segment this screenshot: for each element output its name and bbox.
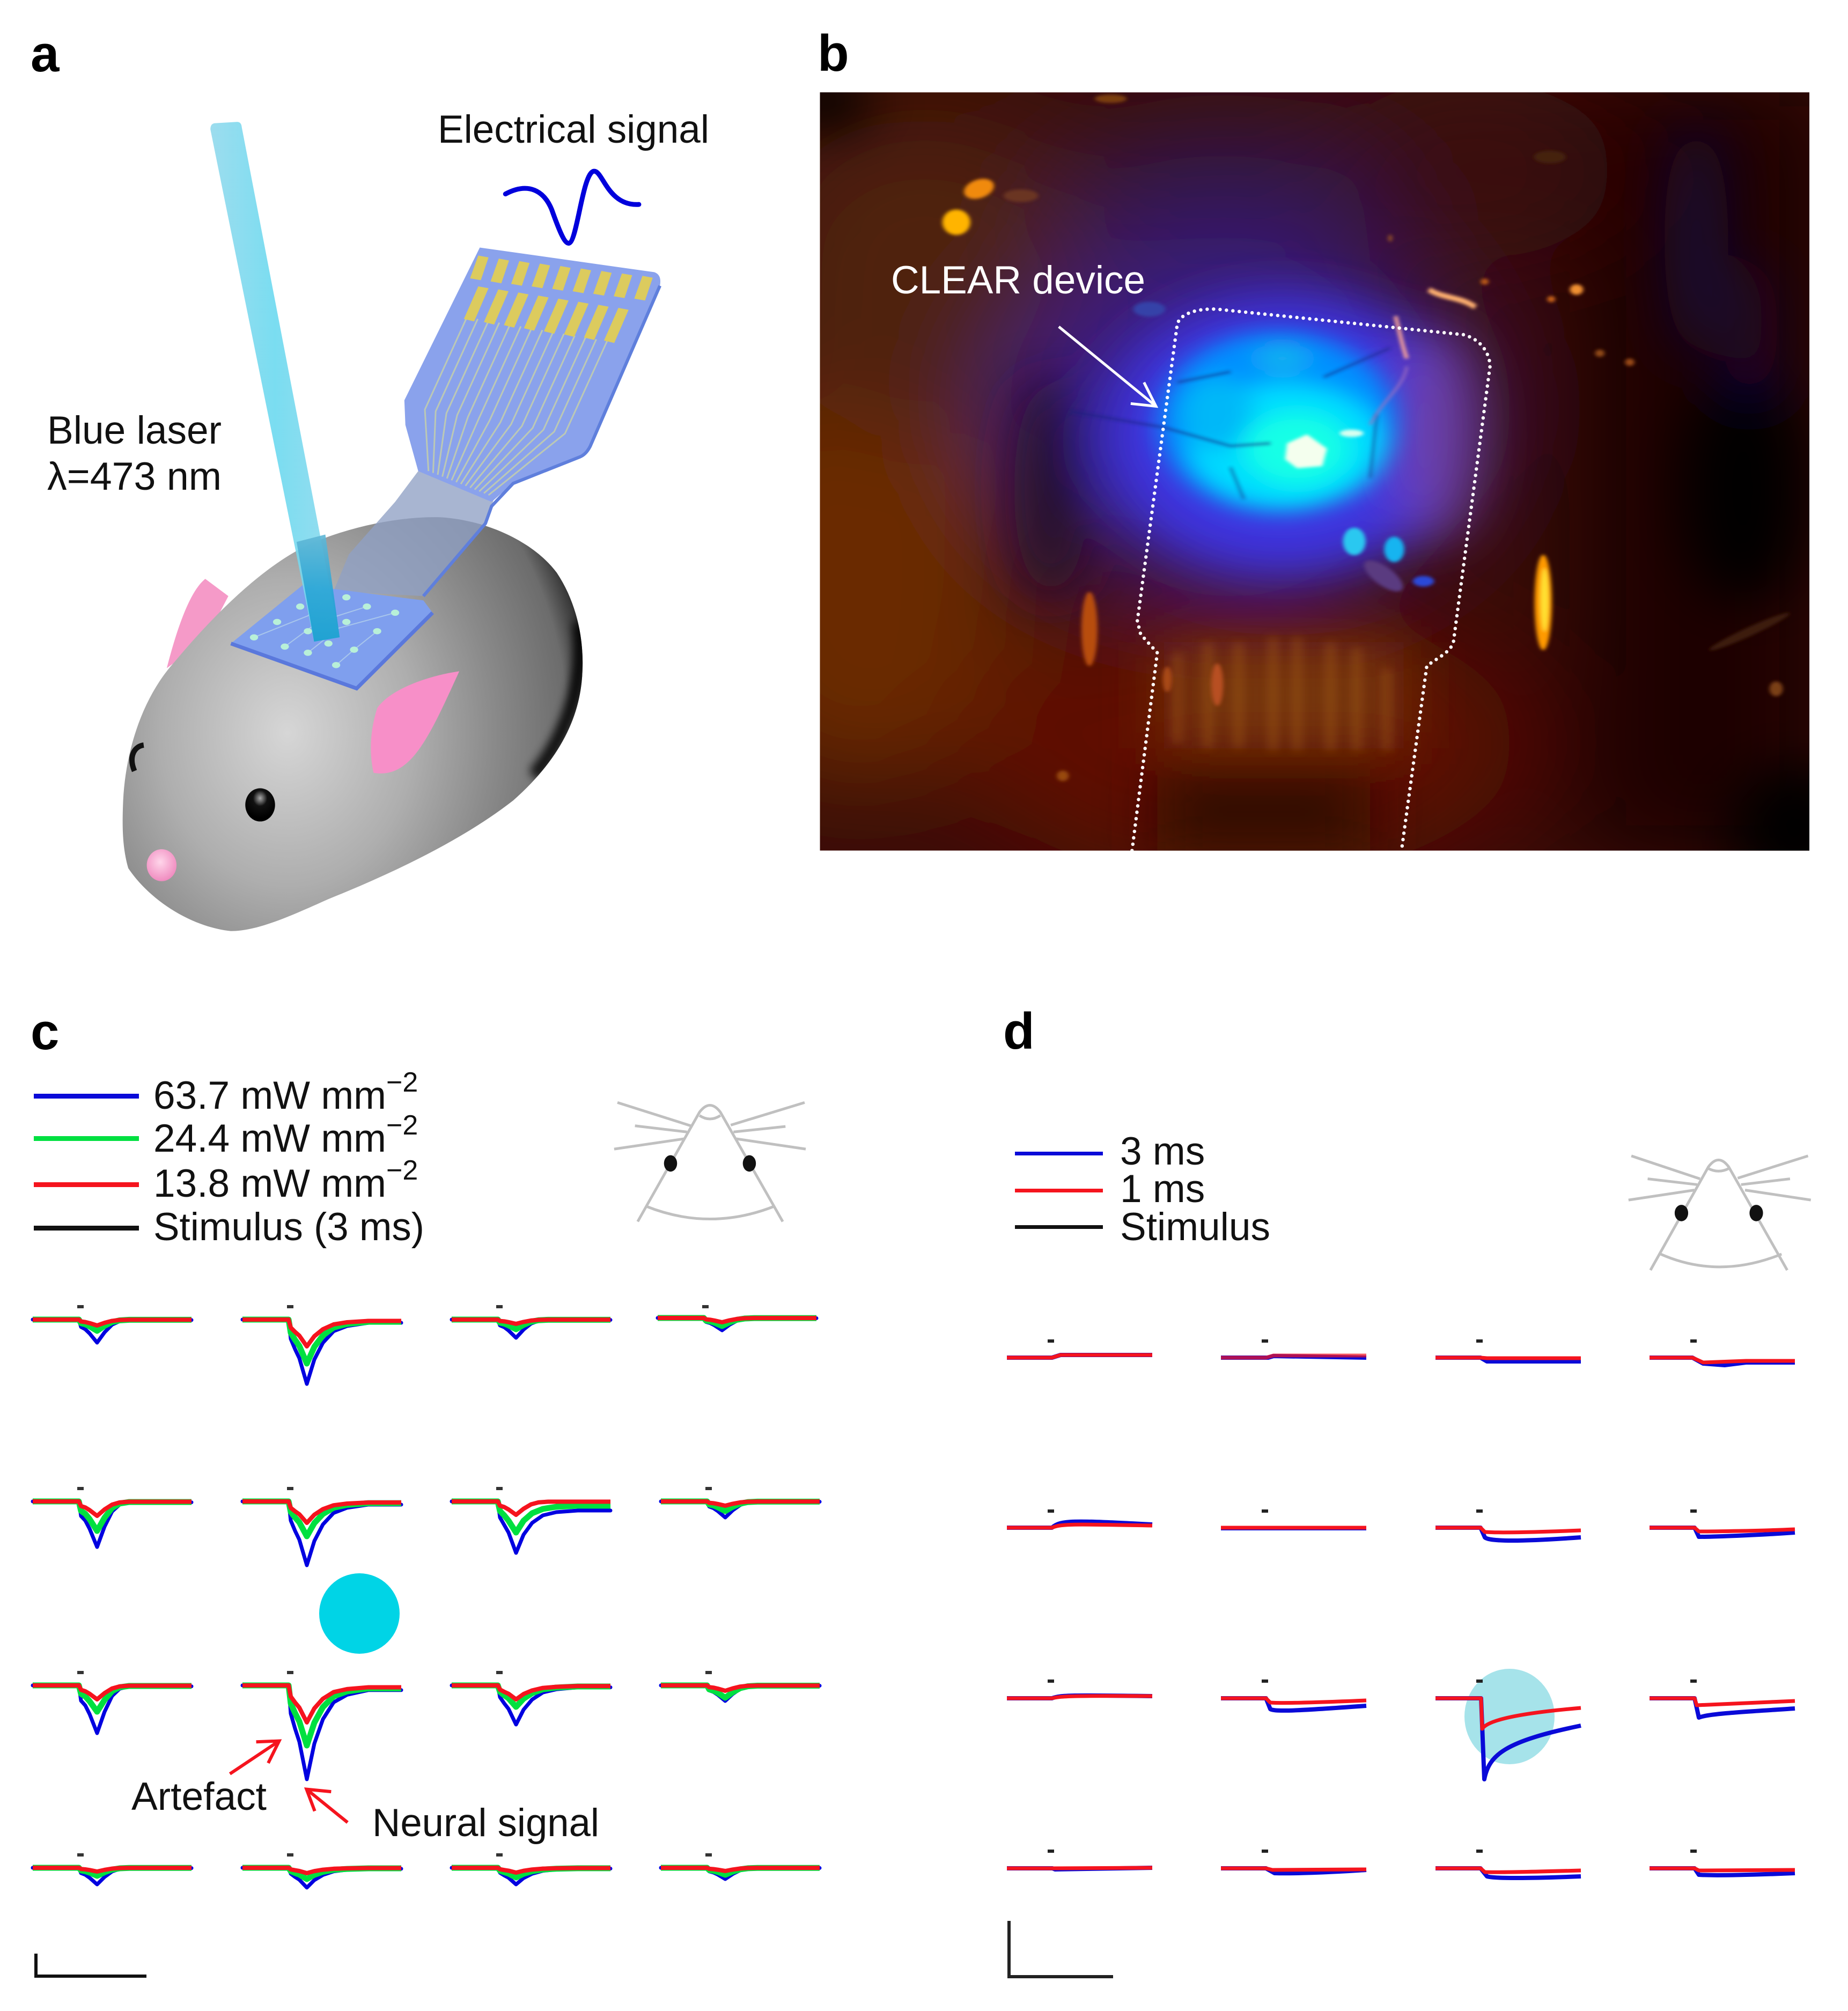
illuminated spot (1159, 332, 1395, 512)
trace r2c4 (661, 1487, 820, 1518)
legend text 13.8: −2 (386, 1155, 418, 1186)
trace r2c2 (1221, 1509, 1366, 1528)
device electrode pad (231, 585, 432, 688)
trace r3c1 (33, 1671, 192, 1733)
legend line blue (34, 1094, 139, 1099)
trace r3c3 (1435, 1679, 1581, 1779)
laser over mouse (297, 534, 340, 642)
label d: d (1003, 1003, 1035, 1060)
legend text 1 ms: 1 ms (1120, 1167, 1205, 1211)
photo (820, 92, 1809, 851)
trace r2c1 (33, 1487, 192, 1547)
trace r1c1 (33, 1305, 192, 1343)
trace r4c1 (1007, 1850, 1152, 1869)
panel c: intensity dependence (31, 1003, 820, 1976)
trace grid c (33, 1305, 820, 1888)
text: electrical signal: Electrical signal (438, 108, 709, 151)
trace r1c3 (1435, 1339, 1581, 1361)
label b: b (818, 25, 849, 82)
legend line stimulus (1015, 1225, 1103, 1229)
trace r2c2 (242, 1487, 401, 1565)
trace r3c2 (242, 1671, 401, 1779)
icon: nose (147, 849, 176, 881)
legend text 24.4: −2 (386, 1110, 418, 1141)
text: blue laser (47, 409, 222, 498)
trace r4c4 (1650, 1850, 1795, 1875)
photo colour fields (820, 92, 1809, 851)
label a: a (31, 25, 60, 83)
trace r3c4 (661, 1671, 820, 1701)
text: artefact: Artefact (131, 1775, 267, 1818)
dark vessels (1071, 348, 1390, 499)
trace r1c2 (242, 1305, 401, 1384)
icon: mouse head top view (614, 1102, 806, 1221)
trace r3c4 (1650, 1679, 1795, 1718)
text: neural signal: Neural signal (372, 1801, 599, 1845)
contact pads (464, 255, 653, 343)
trace r1c1 (1007, 1339, 1152, 1358)
device connector (404, 247, 660, 502)
blue laser beam (210, 122, 340, 642)
arrow: CLEAR device (1059, 327, 1156, 406)
legend line 1 ms (1015, 1189, 1103, 1192)
trace r1c2 (1221, 1339, 1366, 1358)
mouse body (123, 517, 583, 931)
trace r2c1 (1007, 1509, 1152, 1528)
legend c (34, 1067, 424, 1249)
trace r3c3 (452, 1671, 610, 1725)
legend text stimulus: Stimulus (3 ms) (153, 1205, 424, 1249)
scale bar d (1009, 1921, 1113, 1977)
trace grid d (1007, 1339, 1795, 1878)
legend d (1015, 1130, 1270, 1249)
icon: far ear (167, 579, 229, 668)
label c: c (31, 1003, 59, 1060)
electrode pad edge (231, 613, 432, 688)
trace r1c3 (452, 1305, 610, 1338)
trace r1c4 (1650, 1339, 1795, 1365)
electrodes (250, 585, 399, 668)
trace r2c4 (1650, 1509, 1795, 1537)
device cable (334, 471, 495, 596)
trace r4c3 (1435, 1850, 1581, 1878)
device connector edge (423, 286, 660, 596)
white hot spot (1285, 430, 1364, 468)
panel a: mouse with CLEAR device (31, 25, 709, 931)
trace r1c4 (658, 1305, 816, 1330)
icon: eye (245, 788, 275, 821)
panel b: photograph of CLEAR device (820, 33, 1809, 851)
legend text stimulus: Stimulus (1120, 1205, 1270, 1249)
electrical signal waveform (505, 171, 639, 243)
trace r4c3 (452, 1853, 610, 1884)
legend line red (34, 1182, 139, 1187)
trace r4c2 (242, 1853, 401, 1888)
trace r3c2 (1221, 1679, 1366, 1711)
legend text 3 ms: 3 ms (1120, 1130, 1205, 1173)
text: blue laser: Blue laser (47, 409, 222, 452)
electrode wires (254, 598, 395, 665)
trace r4c2 (1221, 1850, 1366, 1873)
arrow: neural signal (306, 1789, 348, 1823)
trace r3c1 (1007, 1679, 1152, 1698)
conductor stripes (1177, 637, 1387, 751)
legend text 63.7: 63.7 mW mm (153, 1074, 386, 1117)
panel d: pulse-duration dependence (1003, 1003, 1811, 1977)
text: blue laser: λ=473 nm (47, 455, 222, 498)
text: CLEAR device: CLEAR device (891, 259, 1145, 302)
legend line black (34, 1226, 139, 1231)
trace r4c4 (661, 1853, 820, 1879)
light spot c (319, 1573, 400, 1654)
icon: near ear (371, 671, 459, 774)
arrow: artefact (230, 1741, 279, 1774)
legend text 63.7: −2 (386, 1067, 418, 1098)
legend text 13.8: 13.8 mW mm (153, 1162, 386, 1205)
icon: far eye (132, 745, 144, 771)
reflections (943, 94, 1793, 781)
legend text 24.4: 24.4 mW mm (153, 1117, 386, 1160)
illustration: mouse, device, laser (123, 122, 660, 931)
trace r2c3 (452, 1487, 610, 1553)
mouse body shading (534, 622, 580, 776)
connector traces (425, 317, 607, 495)
legend line 3 ms (1015, 1152, 1103, 1155)
light spot d (1464, 1669, 1555, 1764)
legend line green (34, 1136, 139, 1141)
scale bar c (36, 1954, 146, 1976)
trace r4c1 (33, 1853, 192, 1884)
icon: mouse head top view (1629, 1156, 1811, 1270)
device outline (1132, 309, 1490, 851)
trace r2c3 (1435, 1509, 1581, 1541)
